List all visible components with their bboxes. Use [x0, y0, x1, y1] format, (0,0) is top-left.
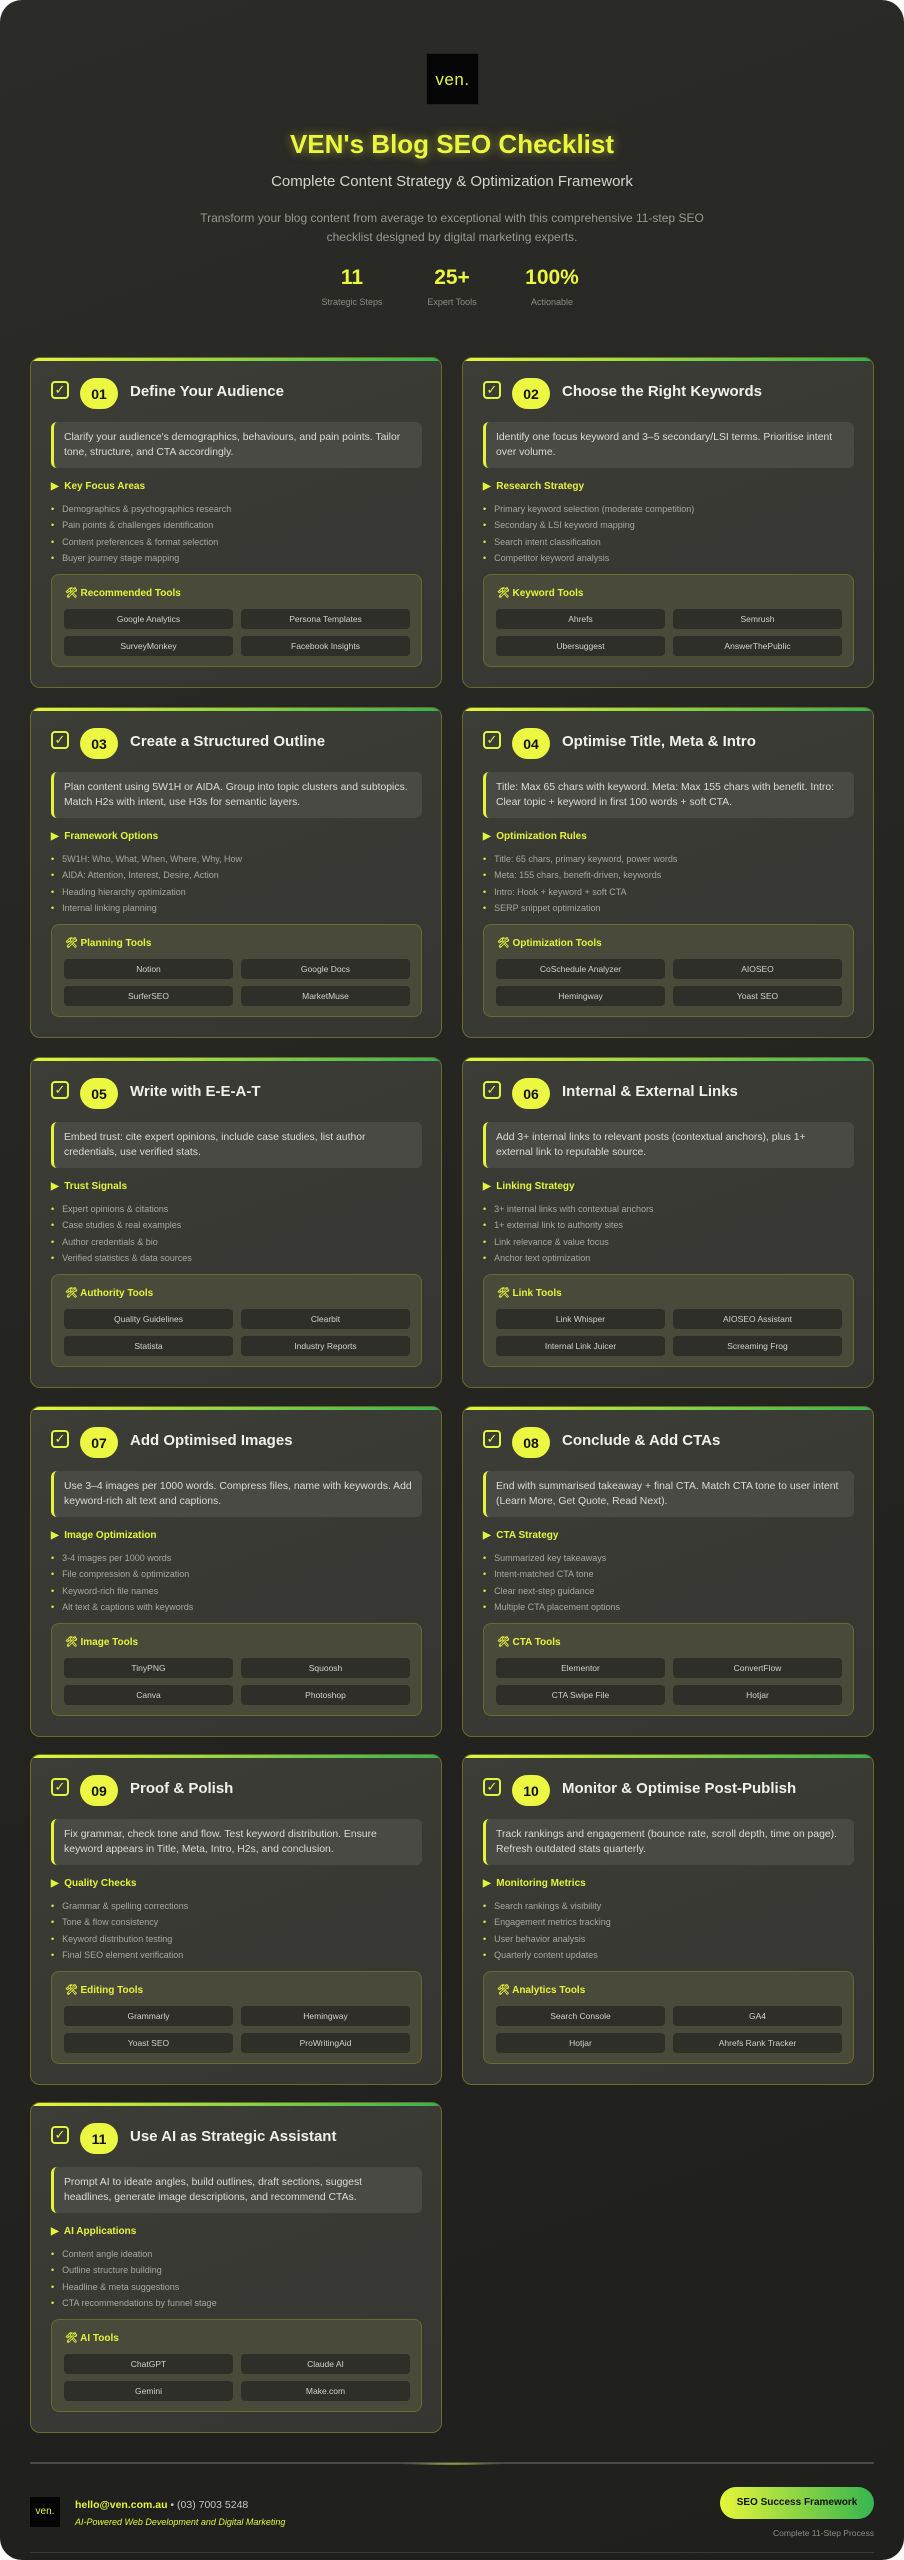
- panel: 11 AI: Prompt AI to ideate angles, build outlines, draft sections, suggest headlines, generate image descriptions, and recommend CTAs.: [64, 2177, 362, 2203]
- panel: 07 images: 07: [91, 1435, 107, 1451]
- panel: 04 title meta intro: Title: 65 chars, primary keyword, power words: [494, 854, 677, 864]
- panel: 04 title meta intro: Yoast SEO: [737, 991, 778, 1001]
- panel: 05 EEAT: 🛠 Authority Tools: [65, 1288, 153, 1299]
- panel: 07 images: Use 3–4 images per 1000 words. Compress files, name with keywords. Add keyword-rich alt text and captions.: [64, 1481, 412, 1507]
- panel: 04 title meta intro: [462, 707, 874, 1038]
- panel: 06 links: 06: [523, 1086, 539, 1102]
- panel: 10 monitor: ✓: [487, 1779, 497, 1794]
- panel: 08 CTAs: CTA Swipe File: [552, 1690, 609, 1700]
- panel: 03 outline: ✓: [55, 732, 65, 747]
- panel: 06 links: Link Whisper: [556, 1314, 605, 1324]
- stats row: [321, 266, 579, 307]
- panel: 10 monitor: User behavior analysis: [494, 1934, 585, 1944]
- panel: 10 monitor: Track rankings and engagement (bounce rate, scroll depth, time on page). Refresh outdated stats quarterly.: [496, 1829, 837, 1855]
- stats row: Expert Tools: [427, 297, 477, 307]
- panel: 11 AI: 11: [92, 2131, 106, 2147]
- panel: 01 define your audience: Demographics & psychographics research: [62, 504, 231, 514]
- panel: 08 CTAs: Multiple CTA placement options: [494, 1602, 620, 1612]
- panel: 01 define your audience: Facebook Insights: [291, 641, 360, 651]
- panel: 01 define your audience: [30, 357, 442, 688]
- panel: 02 keywords: Identify one focus keyword and 3–5 secondary/LSI terms. Prioritise intent over volume.: [496, 432, 832, 458]
- title: VEN's Blog SEO Checklist: [290, 129, 614, 159]
- logo: ven.: [435, 70, 470, 89]
- panel: 11 AI: Claude AI: [307, 2359, 344, 2369]
- panel: 11 AI: Use AI as Strategic Assistant: [130, 2128, 336, 2145]
- panel: 11 AI: ChatGPT: [131, 2359, 166, 2369]
- panel: 10 monitor: Monitor & Optimise Post-Publish: [562, 1780, 796, 1797]
- panel: 11 AI: ✓: [55, 2127, 65, 2142]
- panel: 07 images: Alt text & captions with keywords: [62, 1602, 193, 1612]
- panel: 05 EEAT: ✓: [55, 1082, 65, 1097]
- footer: logo: ven.: [36, 2506, 54, 2517]
- panel: 09 proof: ProWritingAid: [300, 2038, 351, 2048]
- panel: 02 keywords: ▶ Research Strategy: [483, 481, 584, 492]
- panel: 08 CTAs: 🛠 CTA Tools: [497, 1637, 561, 1648]
- panel: 04 title meta intro: SERP snippet optimization: [494, 903, 601, 913]
- panel: 01 define your audience: Pain points & challenges identification: [62, 520, 213, 530]
- panel: 03 outline: Heading hierarchy optimization: [62, 887, 186, 897]
- panel: 06 links: 3+ internal links with contextual anchors: [494, 1204, 654, 1214]
- panel: 06 links: Link relevance & value focus: [494, 1237, 609, 1247]
- panel: 03 outline: Internal linking planning: [62, 903, 157, 913]
- panel: 04 title meta intro: Optimise Title, Meta & Intro: [562, 733, 756, 750]
- panel: 05 EEAT: Author credentials & bio: [62, 1237, 158, 1247]
- footer: tagline: AI-Powered Web Development and Digital Marketing: [75, 2517, 285, 2527]
- panel: 09 proof: Grammarly: [127, 2011, 170, 2021]
- panel: 05 EEAT: Verified statistics & data sources: [62, 1253, 192, 1263]
- panel: 11 AI: Make.com: [306, 2386, 345, 2396]
- panel: 08 CTAs: Conclude & Add CTAs: [562, 1432, 720, 1449]
- panel: 05 EEAT: Embed trust: cite expert opinions, include case studies, list author credentials, use verified stats.: [64, 1132, 366, 1158]
- panel: 04 title meta intro: AIOSEO: [741, 964, 774, 974]
- panel: 06 links: 🛠 Link Tools: [497, 1288, 562, 1299]
- panel: 06 links: Add 3+ internal links to relevant posts (contextual anchors), plus 1+ external link to reputable source.: [496, 1132, 806, 1158]
- panel: 01 define your audience: Buyer journey stage mapping: [62, 553, 179, 563]
- panel: 05 EEAT: ▶ Trust Signals: [51, 1181, 127, 1192]
- panel: 08 CTAs: 08: [523, 1435, 539, 1451]
- panel: 03 outline: MarketMuse: [302, 991, 349, 1001]
- panel: 04 title meta intro: CoSchedule Analyzer: [540, 964, 621, 974]
- panel: 06 links: 1+ external link to authority sites: [494, 1220, 623, 1230]
- panel: 06 links: [462, 1057, 874, 1388]
- panel: 02 keywords: Ahrefs: [568, 614, 593, 624]
- panel: 02 keywords: Search intent classification: [494, 537, 601, 547]
- panel: 10 monitor: Search Console: [550, 2011, 611, 2021]
- panel: 07 images: TinyPNG: [131, 1663, 166, 1673]
- panel: 07 images: File compression & optimization: [62, 1569, 189, 1579]
- stats row: Actionable: [531, 297, 573, 307]
- panel: 08 CTAs: Clear next-step guidance: [494, 1586, 594, 1596]
- panel: 03 outline: AIDA: Attention, Interest, Desire, Action: [62, 870, 219, 880]
- panel: 11 AI: CTA recommendations by funnel stage: [62, 2298, 217, 2308]
- panel: 05 EEAT: Industry Reports: [294, 1341, 357, 1351]
- panel: 03 outline: 5W1H: Who, What, When, Where, Why, How: [62, 854, 242, 864]
- panel: 01 define your audience: Define Your Audience: [130, 383, 284, 400]
- panel: 07 images: Photoshop: [305, 1690, 346, 1700]
- stats row: Strategic Steps: [321, 297, 383, 307]
- panel: 06 links: Anchor text optimization: [494, 1253, 590, 1263]
- panel: 02 keywords: Semrush: [740, 614, 774, 624]
- panel: 01 define your audience: Content preferences & format selection: [62, 537, 218, 547]
- panel: 01 define your audience: SurveyMonkey: [120, 641, 177, 651]
- panel: 06 links: AIOSEO Assistant: [723, 1314, 792, 1324]
- intro text: Transform your blog content from average to exceptional with this comprehensive 11-step SEO checklist designed by digital marketing experts.: [200, 211, 704, 244]
- panel: 07 images: 3-4 images per 1000 words: [62, 1553, 171, 1563]
- panel: 07 images: Squoosh: [309, 1663, 342, 1673]
- panel: 09 proof: Grammar & spelling corrections: [62, 1901, 188, 1911]
- panel: 03 outline: [30, 707, 442, 1038]
- panel: 02 keywords: Choose the Right Keywords: [562, 383, 762, 400]
- panel: 08 CTAs: Hotjar: [746, 1690, 769, 1700]
- panel: 11 AI: Content angle ideation: [62, 2249, 152, 2259]
- panel: 02 keywords: 🛠 Keyword Tools: [497, 588, 583, 599]
- panel: 07 images: [30, 1406, 442, 1737]
- logo: [426, 53, 479, 105]
- panel: 08 CTAs: Summarized key takeaways: [494, 1553, 606, 1563]
- panel: 05 EEAT: Case studies & real examples: [62, 1220, 181, 1230]
- panel: 07 images: 🛠 Image Tools: [65, 1637, 138, 1648]
- panel: 10 monitor: Ahrefs Rank Tracker: [719, 2038, 796, 2048]
- panel: 10 monitor: ▶ Monitoring Metrics: [483, 1878, 586, 1889]
- panel: 10 monitor: 10: [523, 1783, 539, 1799]
- panel: 04 title meta intro: ▶ Optimization Rules: [483, 831, 587, 842]
- panel: 09 proof: ✓: [55, 1779, 65, 1794]
- panel: 01 define your audience: 🛠 Recommended Tools: [65, 588, 181, 599]
- panel: 05 EEAT: Write with E-E-A-T: [130, 1083, 261, 1100]
- panel: 07 images: ▶ Image Optimization: [51, 1530, 156, 1541]
- panel: 09 proof: Hemingway: [303, 2011, 348, 2021]
- stats row: 25+: [434, 266, 470, 289]
- panel: 03 outline: Plan content using 5W1H or AIDA. Group into topic clusters and subtopics. Match H2s with intent, use H3s for semantic layers.: [64, 782, 408, 808]
- panel: 04 title meta intro: 🛠 Optimization Tools: [497, 938, 602, 949]
- panel: 06 links: Internal & External Links: [562, 1083, 738, 1100]
- panel: 10 monitor: Hotjar: [569, 2038, 592, 2048]
- panel: 08 CTAs: Intent-matched CTA tone: [494, 1569, 594, 1579]
- panel: 10 monitor: Engagement metrics tracking: [494, 1917, 611, 1927]
- panel: 10 monitor: 🛠 Analytics Tools: [497, 1985, 585, 1996]
- panel: 06 links: ▶ Linking Strategy: [483, 1181, 575, 1192]
- panel: 02 keywords: Primary keyword selection (moderate competition): [494, 504, 694, 514]
- panel: 09 proof: ▶ Quality Checks: [51, 1878, 136, 1889]
- panel: 07 images: Keyword-rich file names: [62, 1586, 158, 1596]
- footer: badge: [720, 2487, 874, 2519]
- panel: 11 AI: 🛠 AI Tools: [65, 2333, 119, 2344]
- panel: 03 outline: Google Docs: [301, 964, 350, 974]
- panel: 09 proof: Fix grammar, check tone and flow. Test keyword distribution. Ensure keyword appears in Title, Meta, Intro, H2s, and conclusion.: [64, 1829, 377, 1855]
- panel: 02 keywords: Competitor keyword analysis: [494, 553, 609, 563]
- panel: 08 CTAs: Elementor: [561, 1663, 600, 1673]
- panel: 05 EEAT: Quality Guidelines: [114, 1314, 183, 1324]
- panel: 09 proof: Keyword distribution testing: [62, 1934, 172, 1944]
- panel: 04 title meta intro: Intro: Hook + keyword + soft CTA: [494, 887, 627, 897]
- panel: 08 CTAs: ✓: [487, 1431, 497, 1446]
- panel: 10 monitor: Search rankings & visibility: [494, 1901, 601, 1911]
- footer: badge: SEO Success Framework: [737, 2497, 857, 2508]
- panel: 09 proof: Final SEO element verification: [62, 1950, 183, 1960]
- panel: 05 EEAT: Statista: [134, 1341, 163, 1351]
- panel: 01 define your audience: ▶ Key Focus Areas: [51, 481, 145, 492]
- panel: 11 AI: Gemini: [135, 2386, 162, 2396]
- panel: 02 keywords: [462, 357, 874, 688]
- panel: 06 links: Internal Link Juicer: [545, 1341, 616, 1351]
- panel: 07 images: Add Optimised Images: [130, 1432, 293, 1449]
- panel: 09 proof: Proof & Polish: [130, 1780, 233, 1797]
- panel: 09 proof: [30, 1754, 442, 2085]
- panel: 03 outline: SurferSEO: [128, 991, 169, 1001]
- panel: 08 CTAs: ▶ CTA Strategy: [483, 1530, 558, 1541]
- panel: 05 EEAT: Clearbit: [311, 1314, 340, 1324]
- panel: 08 CTAs: End with summarised takeaway + final CTA. Match CTA tone to user intent (Learn More, Get Quote, Read Next).: [496, 1481, 838, 1507]
- panel: 10 monitor: [462, 1754, 874, 2085]
- panel: 04 title meta intro: Hemingway: [558, 991, 603, 1001]
- panel: 10 monitor: Quarterly content updates: [494, 1950, 598, 1960]
- panel: 04 title meta intro: Meta: 155 chars, benefit-driven, keywords: [494, 870, 661, 880]
- subtitle: Complete Content Strategy & Optimization Framework: [271, 173, 633, 190]
- panel: 02 keywords: 02: [523, 386, 539, 402]
- panel: 09 proof: Tone & flow consistency: [62, 1917, 158, 1927]
- panel: 04 title meta intro: 04: [523, 736, 539, 752]
- panel: 03 outline: ▶ Framework Options: [51, 831, 158, 842]
- panel: 06 links: Screaming Frog: [727, 1341, 788, 1351]
- panel: 03 outline: Notion: [136, 964, 161, 974]
- stats row: 11: [341, 266, 363, 289]
- panel: 01 define your audience: 01: [91, 386, 107, 402]
- panel: 06 links: ✓: [487, 1082, 497, 1097]
- panel: 04 title meta intro: ✓: [487, 732, 497, 747]
- panel: 10 monitor: GA4: [749, 2011, 766, 2021]
- panel: 11 AI: [30, 2102, 442, 2433]
- panel: 11 AI: ▶ AI Applications: [51, 2226, 136, 2237]
- panel: 11 AI: Outline structure building: [62, 2265, 162, 2275]
- panel: 02 keywords: AnswerThePublic: [724, 641, 791, 651]
- panel: 08 CTAs: [462, 1406, 874, 1737]
- panel: 11 AI: Headline & meta suggestions: [62, 2282, 179, 2292]
- panel: 01 define your audience: Persona Templates: [289, 614, 362, 624]
- panel: 01 define your audience: ✓: [55, 382, 65, 397]
- panel: 05 EEAT: 05: [91, 1086, 107, 1102]
- footer: logo: [30, 2497, 60, 2527]
- panel: 05 EEAT: [30, 1057, 442, 1388]
- footer: contact: hello@ven.com.au • (03) 7003 5248: [75, 2499, 248, 2511]
- panel: 09 proof: 🛠 Editing Tools: [65, 1985, 143, 1996]
- panel: 05 EEAT: Expert opinions & citations: [62, 1204, 168, 1214]
- panel: 02 keywords: Secondary & LSI keyword mapping: [494, 520, 635, 530]
- panel: 03 outline: Create a Structured Outline: [130, 733, 325, 750]
- panel: 08 CTAs: ConvertFlow: [734, 1663, 781, 1673]
- panel: 01 define your audience: Google Analytics: [117, 614, 180, 624]
- panel: 02 keywords: ✓: [487, 382, 497, 397]
- panel: 04 title meta intro: Title: Max 65 chars with keyword. Meta: Max 155 chars with benefit. Intro: Clear topic + keyword in first 100 words + soft CTA.: [496, 782, 834, 808]
- panel: 07 images: ✓: [55, 1431, 65, 1446]
- footer: process note: Complete 11-Step Process: [773, 2528, 874, 2538]
- panel: 09 proof: Yoast SEO: [128, 2038, 169, 2048]
- panel: 01 define your audience: Clarify your audience's demographics, behaviours, and pain points. Tailor tone, structure, and CTA accordingly.: [64, 432, 400, 458]
- panel: 02 keywords: Ubersuggest: [556, 641, 605, 651]
- stats row: 100%: [525, 266, 579, 289]
- panel: 03 outline: 🛠 Planning Tools: [65, 938, 151, 949]
- panel: 03 outline: 03: [91, 736, 107, 752]
- panel: 07 images: Canva: [136, 1690, 161, 1700]
- panel: 09 proof: 09: [91, 1783, 107, 1799]
